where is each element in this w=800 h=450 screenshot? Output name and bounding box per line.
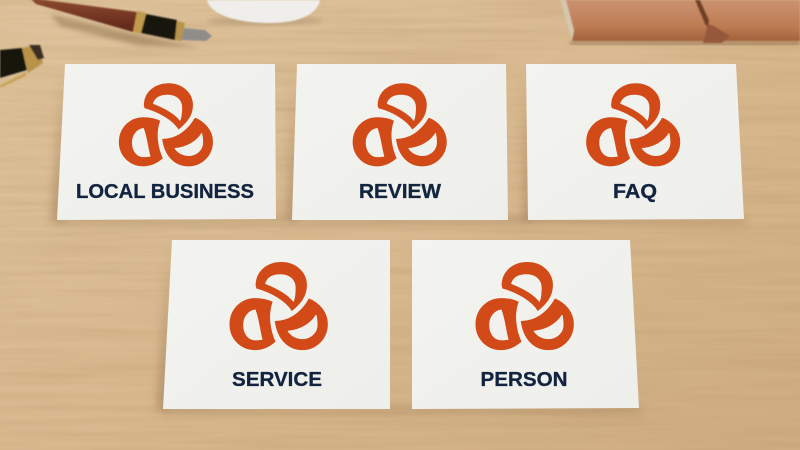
label: Service: SERVICE (232, 369, 322, 391)
pen cap (0, 45, 44, 88)
label: FAQ: FAQ (613, 181, 657, 203)
card: Local Business (57, 64, 276, 220)
coffee cup (207, 0, 323, 26)
fountain pen (30, 0, 212, 48)
card: Review (292, 64, 508, 220)
label: Person: PERSON (480, 369, 568, 391)
icon: orange triskele logo (229, 262, 328, 351)
icon: orange triskele logo (352, 83, 447, 167)
icon: orange triskele logo (586, 83, 681, 167)
icon: orange triskele logo (475, 262, 574, 351)
card: Service (163, 240, 390, 409)
card: FAQ (526, 64, 744, 220)
card shadows (52, 68, 746, 412)
label: Review: REVIEW (359, 181, 441, 203)
icon: orange triskele logo (118, 83, 213, 167)
leather notebook (560, 0, 800, 45)
card: Person (412, 240, 639, 409)
label: Local Business: LOCAL BUSINESS (76, 181, 254, 203)
